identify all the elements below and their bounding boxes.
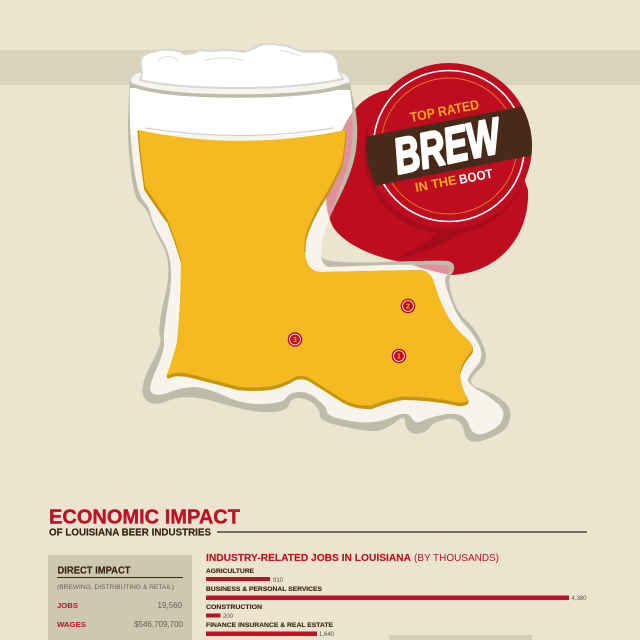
beer edge shading right — [305, 131, 346, 252]
panel: direct impact: DIRECT IMPACT — [58, 566, 130, 576]
badge: top rated brew in the boot — [364, 63, 532, 234]
glass outline — [128, 82, 510, 442]
beer — [138, 130, 474, 410]
foam detail lines — [158, 50, 300, 60]
liquid surface line — [145, 128, 334, 136]
beer glass shaped like Louisiana — [128, 82, 510, 442]
location markers — [288, 299, 415, 363]
marker 3: 3 — [293, 337, 297, 344]
chart: industry-related jobs: 200 — [223, 614, 234, 620]
header band — [0, 50, 640, 85]
row: business and personal services: BUSINESS & PERSONAL SERVICES — [206, 586, 323, 593]
chart: industry-related jobs: 4,380 — [572, 596, 587, 602]
row: agriculture: AGRICULTURE — [206, 568, 255, 575]
badge disc — [366, 63, 532, 229]
badge rings — [374, 70, 524, 222]
badge ribbon — [366, 106, 532, 186]
chart: industry-related jobs: 910 — [273, 578, 284, 584]
badge bottom text: IN THE — [414, 172, 458, 195]
badge shadow — [364, 68, 530, 234]
red back shape — [326, 90, 528, 275]
panel: direct impact: 19,560 — [158, 601, 183, 610]
marker 2: 2 — [406, 304, 410, 310]
beer edge shading — [138, 131, 167, 222]
panel: direct impact: WAGES — [57, 620, 86, 629]
back shape shadow — [396, 224, 476, 259]
glass interior — [130, 88, 504, 434]
marker 1: 1 — [397, 354, 401, 360]
chart title: INDUSTRY-RELATED JOBS IN LOUISIANA — [206, 553, 411, 564]
badge top text: TOP RATED — [409, 97, 481, 125]
badge: top rated brew in the boot: BOOT — [458, 166, 494, 187]
panel: direct impact — [48, 555, 192, 640]
panel: direct impact: $546,709,700 — [134, 620, 184, 629]
panel: direct impact: JOBS — [57, 601, 78, 610]
badge main text: BREW — [389, 107, 508, 185]
row: finance insurance and real estate: FINANCE INSURANCE & REAL ESTATE — [206, 622, 334, 629]
row: construction: CONSTRUCTION — [206, 604, 262, 611]
heading: economic impact: OF LOUISIANA BEER INDUSTRIES — [49, 526, 211, 538]
panel: cropped box — [389, 635, 532, 640]
panel: direct impact: (BREWING, DISTRIBUTING & RETAIL) — [57, 584, 174, 591]
chart: industry-related jobs — [206, 553, 587, 640]
glass rim — [130, 72, 350, 96]
chart: industry-related jobs: 1,640 — [319, 632, 335, 638]
chart: industry-related jobs: (BY THOUSANDS) — [414, 553, 499, 564]
heading: economic impact — [49, 506, 587, 538]
foam — [140, 44, 343, 88]
heading: economic impact: ECONOMIC IMPACT — [49, 506, 240, 528]
